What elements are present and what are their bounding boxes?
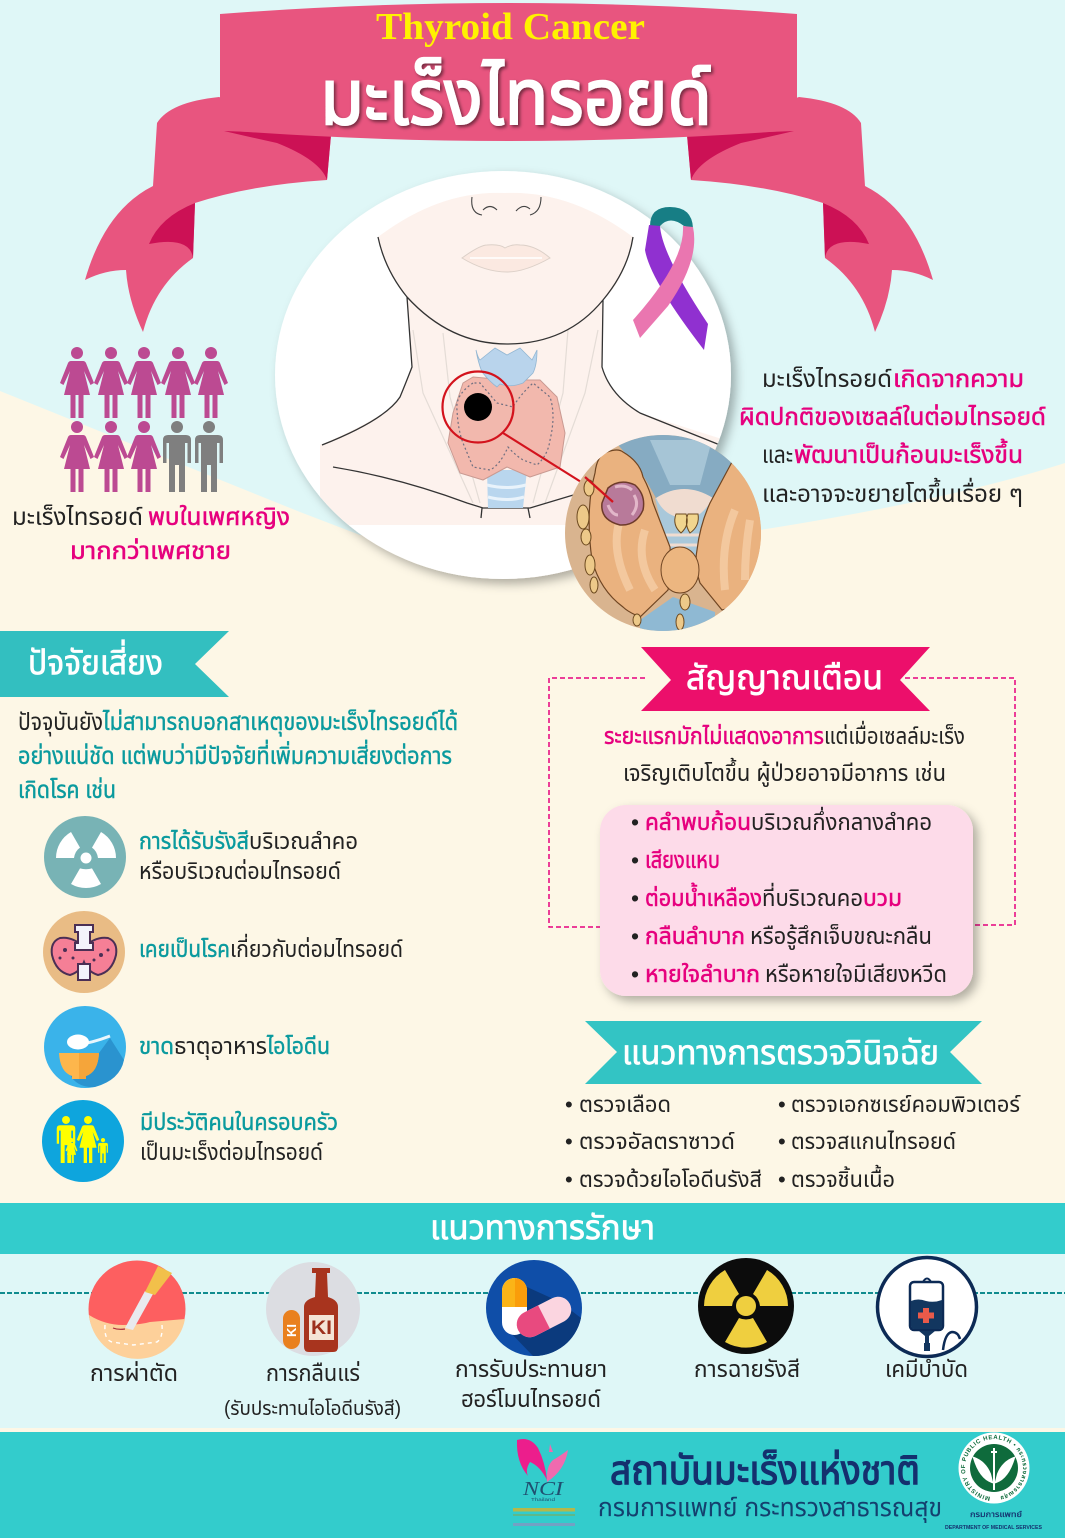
- symptom lines: คลำพบก้อน: [645, 809, 751, 835]
- icon: hormone pills: [486, 1260, 582, 1356]
- ribbon right wing: [687, 97, 933, 332]
- risk text three: ไอโอดีน: [266, 1033, 330, 1059]
- text: gender incidence: มากกว่าเพศชาย: [70, 537, 231, 565]
- icon: radiation: [44, 816, 126, 898]
- white circle: [275, 171, 731, 579]
- row one: [60, 347, 228, 418]
- risk factors header: ปัจจัยเสี่ยง: [28, 639, 163, 682]
- symptoms panel: [600, 805, 973, 996]
- logo: national cancer institute: NCI: [522, 1478, 565, 1500]
- warning signs header: สัญญาณเตือน: [686, 659, 883, 697]
- nose: [472, 197, 541, 215]
- icon: chemotherapy: [878, 1258, 976, 1356]
- warning signs dashed frame: [549, 678, 1015, 927]
- nodes: [675, 514, 698, 533]
- text: cause description: และอาจจะขยายโตขึ้นเรื่อย ๆ: [762, 477, 1023, 508]
- risk text four: เป็นมะเร็งต่อมไทรอยด์: [140, 1139, 323, 1165]
- risk factors intro text: ไม่สามารถบอกสาเหตุของมะเร็งไทรอยด์ได้: [102, 708, 458, 737]
- icon: KI bottle: [266, 1262, 360, 1356]
- text: cause description: และ: [762, 442, 793, 469]
- neck muscles: [413, 330, 598, 503]
- lower trachea: [640, 597, 715, 631]
- risk factors intro text: ปัจจุบันยัง: [18, 709, 103, 737]
- icon: iodine spoon and bowl: [44, 1006, 126, 1088]
- text: cause description: พัฒนาเป็นก้อนมะเร็งขึ้น: [794, 438, 1023, 469]
- risk factors header: [0, 631, 229, 697]
- symptom lines: บริเวณกึ่งกลางลำคอ: [751, 806, 932, 835]
- central neck illustration: [275, 171, 731, 579]
- treatment labels: การผ่าตัด: [90, 1360, 178, 1386]
- icon: thyroid: [43, 911, 125, 993]
- icon: KI bottle: KI: [311, 1318, 332, 1339]
- risk text three: ธาตุอาหาร: [174, 1033, 267, 1060]
- diagnosis list: ตรวจเลือด: [579, 1092, 671, 1117]
- symptom lines: •: [631, 809, 639, 835]
- icon: surgery: [88, 1260, 186, 1359]
- diagnosis list: ตรวจเอกซเรย์คอมพิวเตอร์: [791, 1092, 1021, 1117]
- treatment section background: [0, 1254, 1065, 1428]
- logo: ministry of public health seal: MINISTRY OF PUBLIC HEALTH • กระทรวงสาธารณสุข: [960, 1434, 1026, 1501]
- red line into tumour: [585, 477, 613, 502]
- diagnosis header: แนวทางการตรวจวินิจฉัย: [622, 1034, 939, 1072]
- treatment header band: แนวทางการรักษา: [430, 1209, 655, 1247]
- warning signs header: [641, 647, 930, 711]
- title english: Thyroid Cancer: [376, 6, 645, 48]
- thyroid cartilage: [476, 348, 537, 387]
- treatment labels: การกลืนแร่: [266, 1360, 360, 1386]
- gland lobes: [589, 450, 671, 617]
- treatment labels: (รับประทานไอโอดีนรังสี): [224, 1398, 401, 1420]
- diagnosis list: ตรวจสแกนไทรอยด์: [791, 1129, 956, 1154]
- ribbon purple strand: [645, 225, 708, 350]
- ribbon pink strand: [633, 226, 694, 338]
- diagnosis list: •: [778, 1167, 786, 1192]
- risk text two: [139, 933, 403, 962]
- symptom lines: •: [631, 885, 639, 911]
- footer band: [0, 1432, 1065, 1538]
- airway top: [618, 435, 736, 498]
- ribbon main band: [220, 3, 797, 141]
- risk text two: เคยเป็นโรค: [139, 936, 230, 962]
- title thai: มะเร็งไทรอยด์: [320, 53, 712, 141]
- symptom lines: ต่อมน้ำเหลือง: [645, 882, 762, 911]
- diagnosis list: •: [565, 1129, 573, 1154]
- tumour lump: [602, 482, 644, 525]
- symptom lines: กลืนลำบาก: [645, 923, 745, 949]
- awareness ribbon: [633, 207, 708, 350]
- risk factors intro text: [18, 708, 458, 804]
- text: cause description: มะเร็งไทรอยด์: [762, 365, 892, 393]
- inset thyroid close-up: [565, 435, 761, 631]
- symptom lines: •: [631, 961, 639, 987]
- text: gender incidence: [12, 503, 290, 565]
- symptom lines: หรือหายใจมีเสียงหวีด: [765, 961, 947, 987]
- ribbon left wing: [85, 97, 331, 332]
- risk factors intro text: เกิดโรค เช่น: [18, 776, 116, 804]
- icon: family: [42, 1100, 124, 1182]
- footer department: กรมการแพทย์ กระทรวงสาธารณสุข: [598, 1492, 942, 1523]
- symptom lines: •: [631, 923, 639, 949]
- text: cause description: เกิดจากความ: [893, 366, 1024, 393]
- treatment labels: ฮอร์โมนไทรอยด์: [461, 1386, 601, 1412]
- diagnosis list: ตรวจอัลตราซาวด์: [579, 1129, 735, 1154]
- logo: ministry of public health seal: DEPARTMENT OF MEDICAL SERVICES: [945, 1525, 1042, 1531]
- isthmus: [661, 547, 699, 593]
- lips: [462, 245, 550, 272]
- symptom lines: หายใจลำบาก: [645, 961, 760, 987]
- text: cause description: [739, 365, 1046, 508]
- row two men: [163, 421, 223, 492]
- text: gender incidence: พบในเพศหญิง: [148, 504, 290, 531]
- risk factors intro text: อย่างแน่ชัด แต่พบว่ามีปัจจัยที่เพิ่มความเสี่ยงต่อการ: [18, 739, 452, 770]
- diagnosis list: [565, 1092, 1021, 1192]
- symptom lines: หรือรู้สึกเจ็บขณะกลืน: [750, 923, 932, 951]
- trachea: [487, 470, 527, 508]
- jaw and neck lines: [322, 237, 720, 518]
- logo: ministry of public health seal: กรมการแพทย์: [970, 1510, 1022, 1519]
- warning signs intro text: ระยะแรกมักไม่แสดงอาการ: [604, 723, 824, 749]
- risk text one: หรือบริเวณต่อมไทรอยด์: [139, 858, 341, 884]
- logo: national cancer institute: [513, 1439, 575, 1526]
- risk text one: บริเวณลำคอ: [249, 828, 358, 854]
- text: cause description: ผิดปกติของเซลล์ในต่อมไทรอยด์: [739, 403, 1046, 431]
- diagnosis list: •: [778, 1129, 786, 1154]
- risk text three: [139, 1033, 330, 1060]
- ribbon right folds: [687, 131, 869, 258]
- tumour spot: [464, 393, 492, 421]
- diagnosis list: •: [565, 1092, 573, 1117]
- treatment labels: การฉายรังสี: [694, 1356, 800, 1382]
- risk text three: ขาด: [139, 1033, 174, 1059]
- ribbon teal top: [650, 207, 693, 228]
- skin: [320, 193, 725, 525]
- symptom lines: ที่บริเวณคอ: [762, 882, 863, 911]
- footer institute name: สถาบันมะเร็งแห่งชาติ: [610, 1449, 920, 1493]
- diagnosis list: ตรวจชิ้นเนื้อ: [791, 1164, 895, 1192]
- footer strip: [0, 1428, 1065, 1432]
- warning signs intro text: แต่เมื่อเซลล์มะเร็ง: [824, 720, 965, 749]
- diagnosis header: [585, 1021, 982, 1084]
- title ribbon: [85, 3, 933, 332]
- treatment labels: การรับประทานยา: [455, 1356, 607, 1382]
- airway lens and rings: [655, 498, 708, 556]
- red magnifier ring and line: [503, 433, 613, 502]
- symptom lines: •: [631, 847, 639, 873]
- diagnosis list: ตรวจด้วยไอโอดีนรังสี: [579, 1167, 762, 1192]
- risk text two: เกี่ยวกับต่อมไทรอยด์: [230, 933, 403, 962]
- risk text four: [140, 1109, 338, 1165]
- treatment dashed line: [0, 1292, 1065, 1294]
- treatment labels: [90, 1356, 968, 1420]
- risk text four: มีประวัติคนในครอบครัว: [140, 1109, 338, 1135]
- icon: radiation therapy: [698, 1258, 794, 1354]
- diagnosis list: •: [565, 1167, 573, 1192]
- row two women: [60, 421, 161, 492]
- background: cream wave: [0, 391, 1065, 1210]
- symptom lines: บวม: [863, 885, 902, 911]
- treatment header band: [0, 1203, 1065, 1254]
- logo: national cancer institute: Thailand: [531, 1497, 556, 1502]
- warning signs intro text: เจริญเติบโตขึ้น ผู้ป่วยอาจมีอาการ เช่น: [623, 757, 946, 788]
- symptom lines: เสียงแหบ: [645, 847, 720, 873]
- symptom lines: [631, 806, 947, 987]
- thyroid gland: [448, 377, 565, 480]
- treatment labels: เคมีบำบัด: [885, 1356, 968, 1382]
- icon: KI bottle: KI: [284, 1324, 299, 1337]
- logo: ministry of public health seal: [945, 1432, 1042, 1531]
- risk text one: การได้รับรังสี: [139, 828, 249, 854]
- diagnosis list: •: [778, 1092, 786, 1117]
- risk text one: [139, 828, 358, 884]
- text: gender incidence: มะเร็งไทรอยด์: [12, 503, 143, 531]
- warning signs intro text: [604, 720, 965, 788]
- pictogram: women vs men: [60, 347, 228, 492]
- ribbon left folds: [149, 131, 331, 258]
